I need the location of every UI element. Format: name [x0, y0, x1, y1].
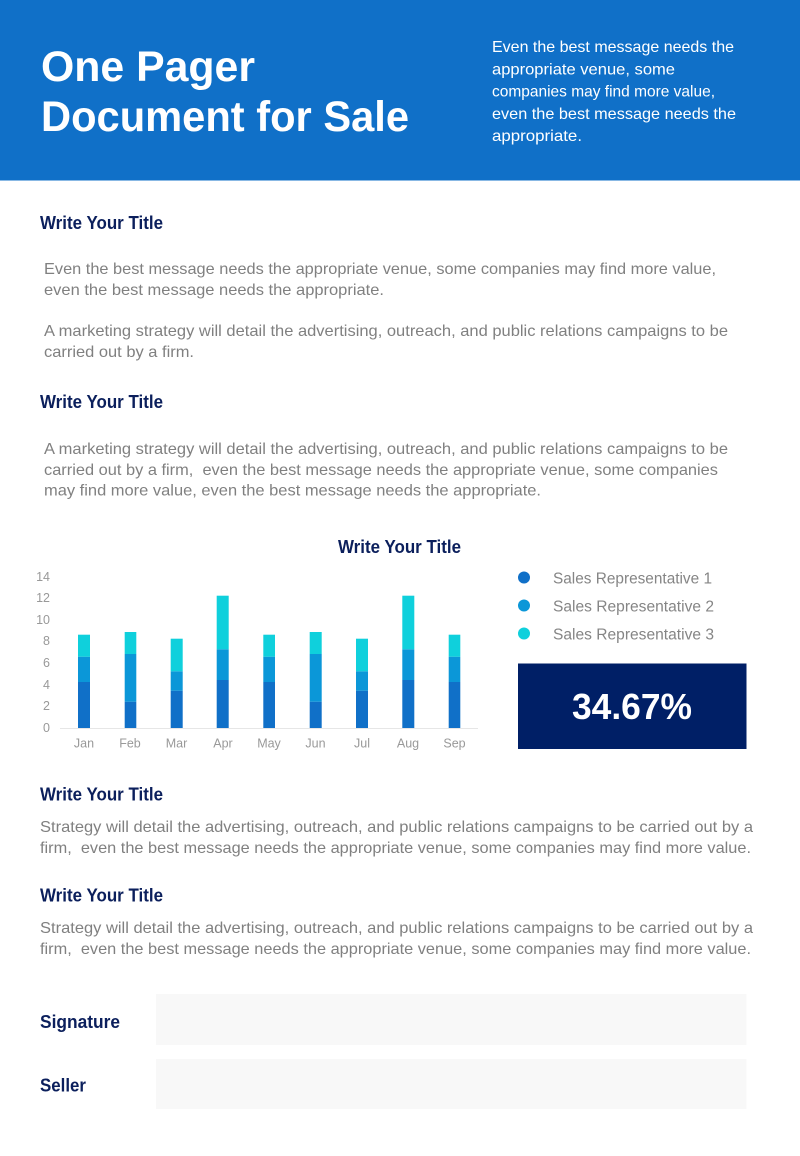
chart legend: [518, 570, 714, 644]
bars: [78, 596, 460, 728]
x axis labels: Aug: [397, 736, 419, 750]
x axis labels: Jun: [305, 736, 326, 750]
header description: [492, 39, 736, 145]
x axis labels: May: [257, 736, 282, 750]
y axis labels: 14: [36, 570, 50, 584]
signature label: Signature: [40, 1012, 120, 1032]
header description: appropriate venue, some: [492, 62, 675, 78]
section 3 body: [40, 819, 753, 857]
title: Document for Sale: [41, 93, 409, 141]
header description: Even the best message needs the: [492, 39, 734, 56]
section 3 heading: Write Your Title: [40, 784, 163, 804]
section 1 body: even the best message needs the appropriate.: [44, 282, 384, 299]
x axis labels: Sep: [443, 736, 466, 750]
section 1 body: carried out by a firm.: [44, 344, 194, 361]
x axis labels: Feb: [119, 736, 141, 750]
chart legend: Sales Representative 2: [553, 598, 714, 616]
section 1 body: [44, 261, 728, 361]
chart heading: Write Your Title: [338, 537, 461, 557]
section 4 body: firm, even the best message needs the appropriate venue, some companies may find more value.: [40, 941, 751, 958]
y axis labels: 2: [43, 699, 50, 713]
y axis labels: 12: [36, 591, 50, 605]
section 4 body: [40, 920, 753, 958]
y axis labels: 0: [43, 721, 50, 735]
x axis labels: [74, 736, 466, 750]
y axis labels: 10: [36, 613, 50, 627]
section 2 body: A marketing strategy will detail the advertising, outreach, and public relations campaigns to be: [44, 441, 728, 458]
section 3 body: Strategy will detail the advertising, outreach, and public relations campaigns to be carried out by a: [40, 819, 753, 836]
title: [41, 43, 409, 141]
y axis labels: 4: [43, 678, 50, 692]
stacked bar chart: [36, 570, 478, 750]
stat box: 34.67%: [572, 686, 692, 727]
stat box: [518, 664, 746, 749]
section 1 body: Even the best message needs the appropriate venue, some companies may find more value,: [44, 261, 716, 278]
section 4 heading: Write Your Title: [40, 886, 163, 906]
section 2 heading: Write Your Title: [40, 392, 163, 412]
chart legend: Sales Representative 1: [553, 570, 712, 588]
title: One Pager: [41, 43, 255, 91]
x axis labels: Jul: [354, 736, 370, 750]
section 1 body: A marketing strategy will detail the advertising, outreach, and public relations campaigns to be: [44, 323, 728, 340]
header description: appropriate.: [492, 128, 582, 145]
section 4 body: Strategy will detail the advertising, outreach, and public relations campaigns to be carried out by a: [40, 920, 753, 937]
y axis labels: 6: [43, 656, 50, 670]
section 2 body: may find more value, even the best message needs the appropriate.: [44, 482, 541, 500]
seller label: Seller: [40, 1076, 86, 1096]
header description: companies may find more value,: [492, 84, 715, 100]
y axis labels: 8: [43, 634, 50, 648]
x axis labels: Apr: [213, 736, 233, 750]
seller field: [156, 1059, 746, 1109]
header banner: [0, 0, 800, 180]
y axis labels: [36, 570, 50, 735]
chart legend: Sales Representative 3: [553, 626, 714, 644]
section 2 body: carried out by a firm, even the best message needs the appropriate venue, some companies: [44, 462, 718, 479]
section 2 body: [44, 441, 728, 500]
x axis labels: Jan: [74, 736, 94, 750]
x axis labels: Mar: [166, 736, 187, 750]
section 3 body: firm, even the best message needs the appropriate venue, some companies may find more value.: [40, 840, 751, 857]
section 1 heading: Write Your Title: [40, 213, 163, 233]
header description: even the best message needs the: [492, 106, 736, 123]
signature field: [156, 994, 746, 1045]
